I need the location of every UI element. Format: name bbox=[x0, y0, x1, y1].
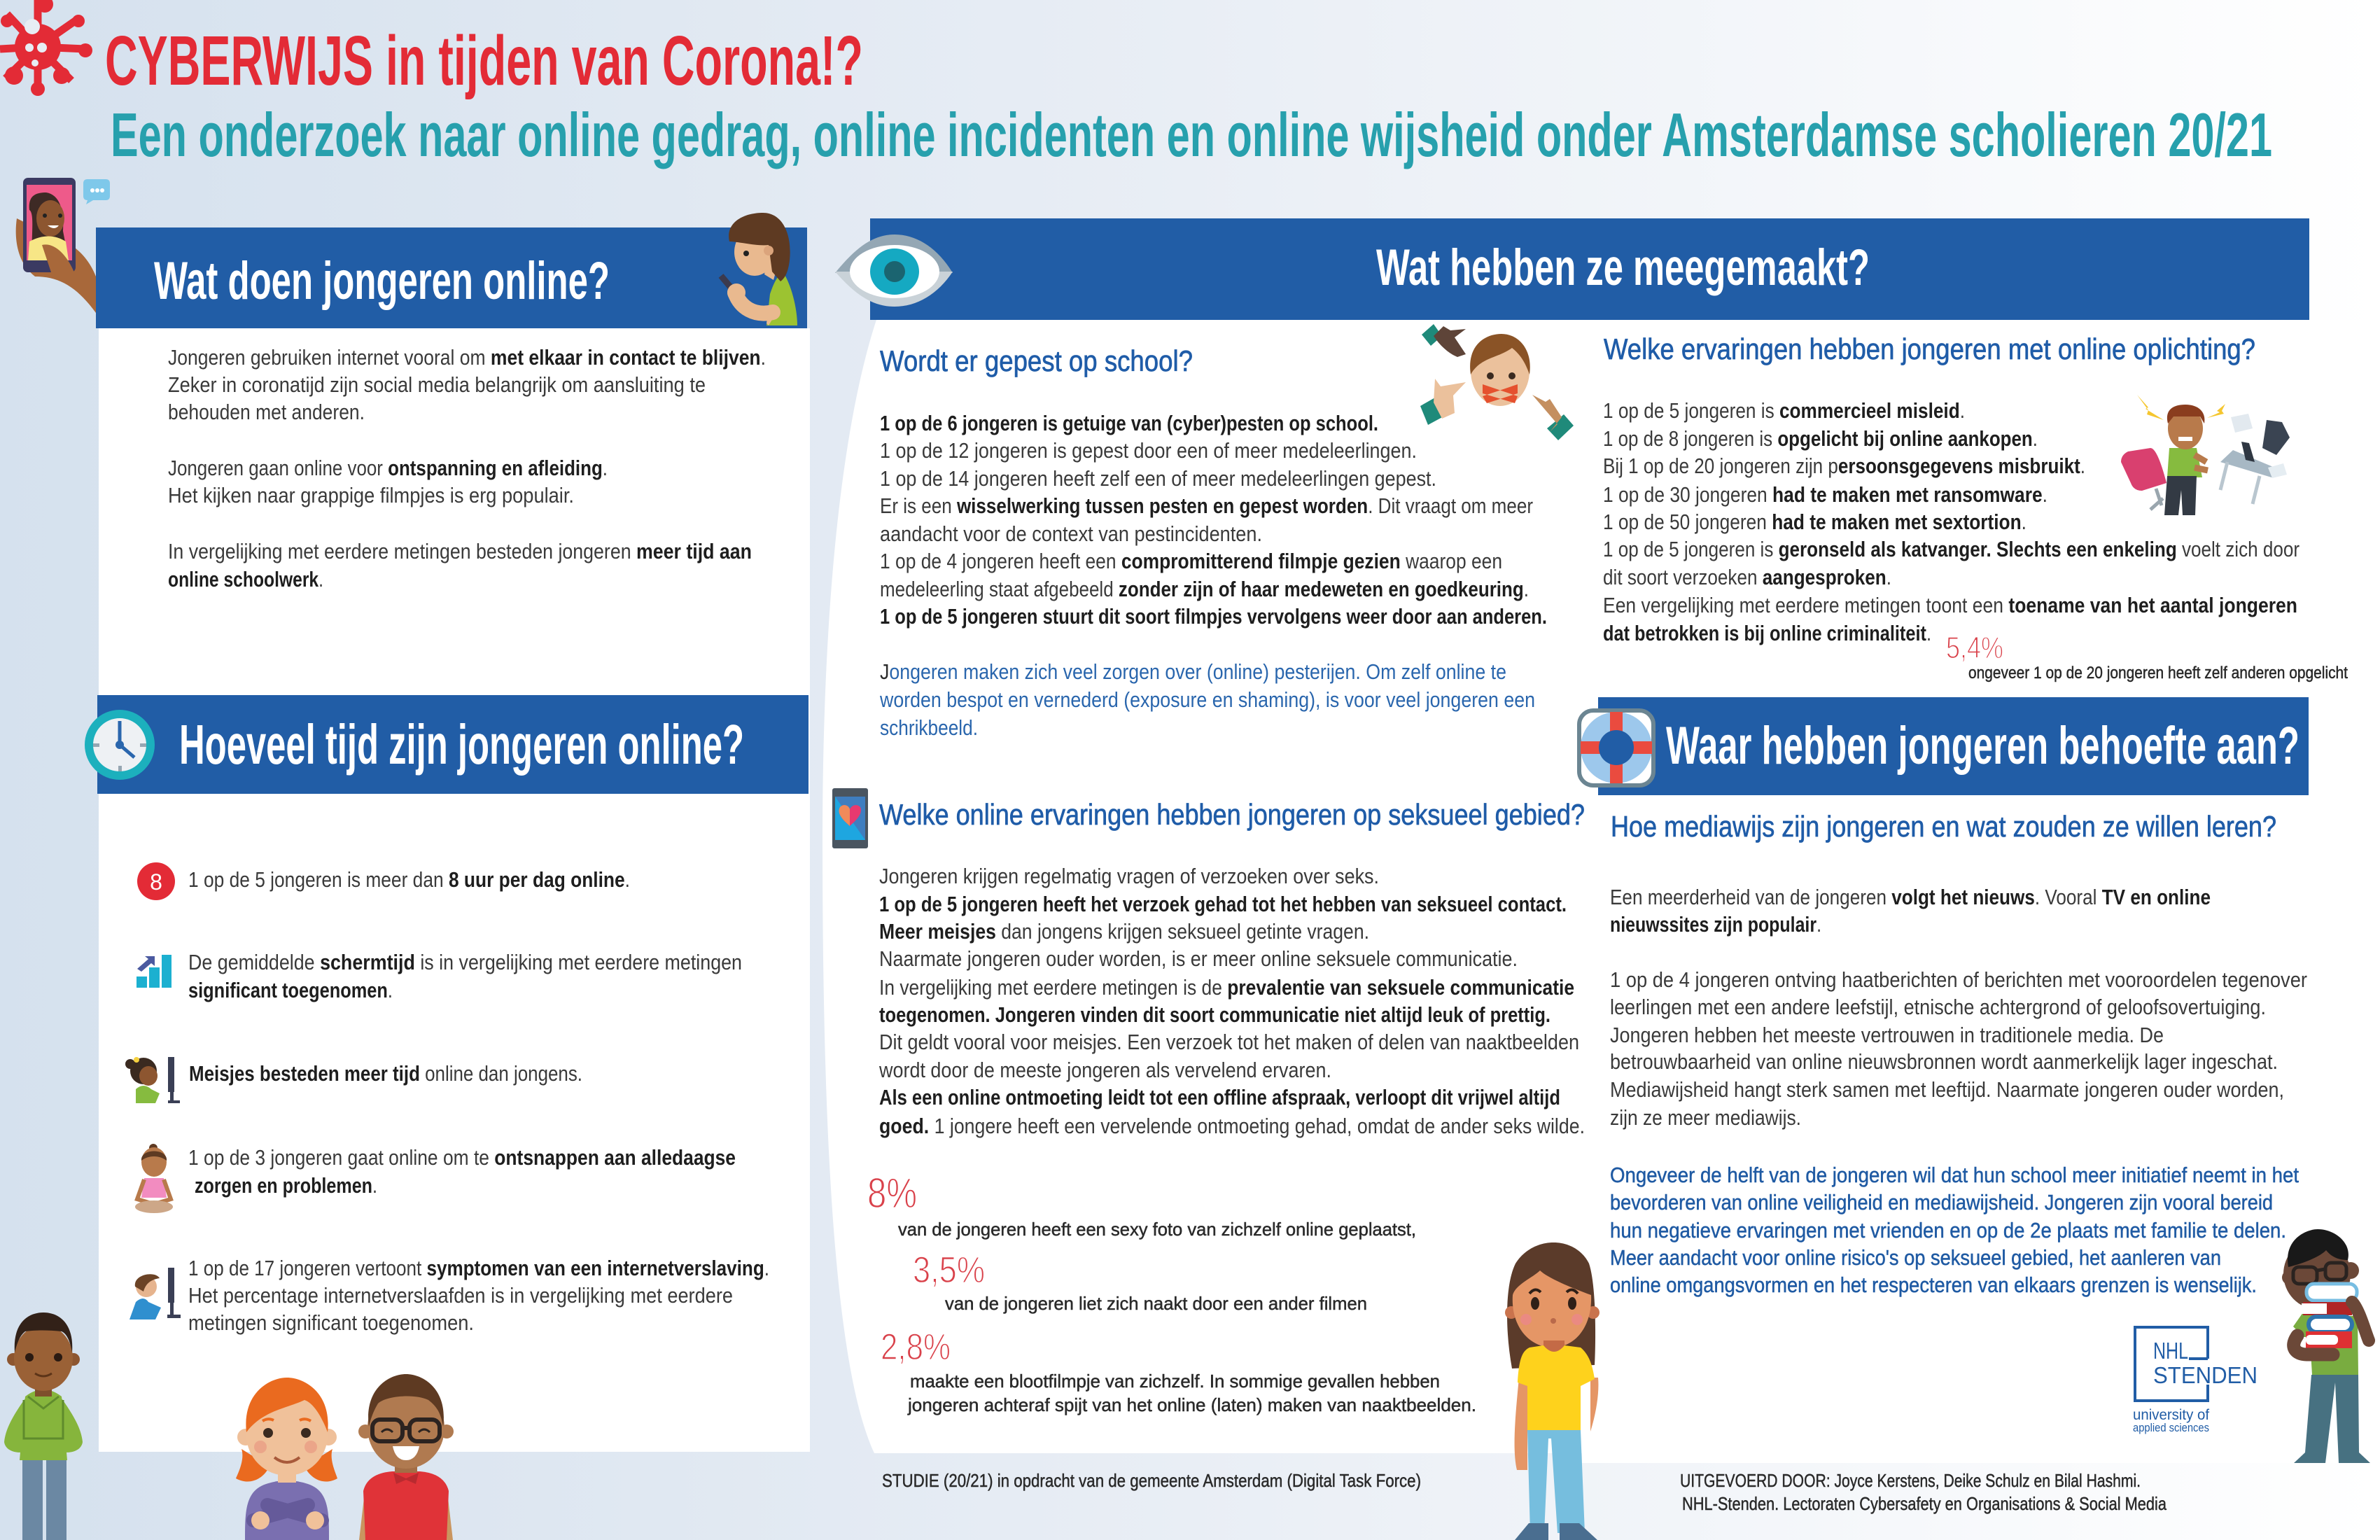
body text: oplichting: Bij 1 op de 20 jongeren zijn persoonsgegevens misbruikt. bbox=[1603, 454, 2085, 478]
body text: seksueel: In vergelijking met eerdere metingen is de prevalentie van seksuele communicatie bbox=[879, 975, 1574, 1000]
logo: NHL Stenden: applied sciences bbox=[2133, 1421, 2209, 1434]
body text: seksueel: Naarmate jongeren ouder worden, is er meer online seksuele communicatie. bbox=[879, 946, 1518, 971]
icon: meisje achter scherm bbox=[125, 1057, 180, 1103]
stat: 2,8%: jongeren achteraf spijt van het online (laten) maken van naaktbeelden. bbox=[907, 1394, 1476, 1415]
stat: 3,5%: van de jongeren liet zich naakt door een ander filmen bbox=[945, 1293, 1367, 1314]
section: online oplichting bbox=[1603, 332, 2348, 682]
icon: 8 uur bbox=[137, 862, 175, 900]
stat: 2,8%: maakte een blootfilmpje van zichzelf. In sommige gevallen hebben bbox=[910, 1371, 1440, 1392]
body text: pesten: 1 op de 4 jongeren heeft een compromitterend filmpje gezien waarop een bbox=[880, 549, 1502, 573]
stat: 5,4%: 5,4% bbox=[1946, 631, 2003, 665]
stat: 8%: 8% bbox=[867, 1170, 917, 1217]
icon: clock bbox=[85, 710, 155, 780]
footer: studie: STUDIE (20/21) in opdracht van de gemeente Amsterdam (Digital Task Force) bbox=[882, 1470, 1421, 1491]
body text: online activiteiten: In vergelijking met eerdere metingen besteden jongeren meer tijd aan bbox=[168, 539, 752, 564]
icon: getapete jongen met wijzende handen bbox=[1420, 324, 1574, 440]
body text: online activiteiten: Jongeren gaan online voor ontspanning en afleiding. bbox=[168, 456, 608, 480]
stat: 3,5% bbox=[913, 1250, 1367, 1314]
body text: oplichting: 1 op de 50 jongeren had te maken met sextortion. bbox=[1603, 510, 2026, 534]
panel: wat doen jongeren online bbox=[96, 227, 807, 592]
icon: jongen achter scherm bbox=[130, 1268, 181, 1320]
heading: seksueel gebied: Welke online ervaringen hebben jongeren op seksueel gebied? bbox=[879, 798, 1585, 831]
stat: 8% bbox=[867, 1170, 1416, 1240]
body text: mediawijs bbox=[1610, 885, 2307, 1130]
body text: pesten: Er is een wisselwerking tussen pesten en gepest worden. Dit vraagt om meer bbox=[880, 493, 1533, 518]
body text: oplichting: 1 op de 5 jongeren is geronseld als katvanger. Slechts een enkeling voelt zich door bbox=[1603, 537, 2300, 561]
callout: zorgen over pesterijen bbox=[879, 659, 1535, 740]
body text: oplichting: Een vergelijking met eerdere metingen toont een toename van het aantal jongeren bbox=[1603, 593, 2297, 617]
heading: meegemaakt: Wat hebben ze meegemaakt? bbox=[1376, 239, 1870, 296]
heading: wat doen: Wat doen jongeren online? bbox=[154, 251, 610, 311]
body text: oplichting: dit soort verzoeken aangesproken. bbox=[1603, 565, 1891, 589]
character: girl red hair bbox=[236, 1378, 337, 1540]
icon: red virus bbox=[0, 0, 92, 96]
body text: seksueel: goed. 1 jongere heeft een vervelende ontmoeting gehad, omdat de ander seks wilde. bbox=[879, 1114, 1585, 1138]
body text: online activiteiten: Jongeren gebruiken internet vooral om met elkaar in contact te blijven. bbox=[168, 345, 766, 370]
footer: uitgevoerd door: UITGEVOERD DOOR: Joyce Kerstens, Deike Schulz en Bilal Hashmi. bbox=[1680, 1470, 2141, 1491]
section: mediawijsheid bbox=[1610, 810, 2307, 1297]
heading: gepest: Wordt er gepest op school? bbox=[880, 344, 1193, 377]
character: girl yellow shirt bbox=[1505, 1242, 1600, 1540]
callout: behoefte aan initiatief school: online omgangsvormen en het respecteren van elkaars grenzen is wenselijk. bbox=[1610, 1273, 2257, 1297]
logo: NHL Stenden: university of bbox=[2133, 1407, 2209, 1423]
icon: 8 uur: 8 bbox=[150, 869, 162, 895]
stat: internetverslaving: Het percentage internetverslaafden is in vergelijking met eerdere bbox=[188, 1283, 733, 1308]
panel: waar hebben jongeren behoefte aan header bbox=[1579, 697, 2309, 795]
section: wordt er gepest bbox=[879, 324, 1574, 740]
callout: zorgen over pesterijen: Jongeren maken zich veel zorgen over (online) pesterijen. Om zelf online te bbox=[880, 659, 1506, 684]
body text: mediawijs: Een meerderheid van de jongeren volgt het nieuws. Vooral TV en online bbox=[1610, 885, 2211, 909]
body text: mediawijs: 1 op de 4 jongeren ontving haatberichten of berichten met vooroordelen tegenover bbox=[1610, 967, 2307, 992]
icon: reddingsboei bbox=[1579, 710, 1653, 785]
callout: behoefte aan initiatief school: bevorderen van online veiligheid en mediawijsheid. Jongeren zijn vooral bereid bbox=[1610, 1190, 2273, 1214]
stat: 8 uur: 1 op de 5 jongeren is meer dan 8 uur per dag online. bbox=[188, 867, 630, 892]
callout: behoefte aan initiatief school: Ongeveer de helft van de jongeren wil dat hun school meer initiatief neemt in het bbox=[1610, 1163, 2299, 1187]
body text: pesten: 1 op de 5 jongeren stuurt dit soort filmpjes vervolgens weer door aan anderen. bbox=[880, 604, 1547, 629]
body text: pesten: 1 op de 6 jongeren is getuige van (cyber)pesten op school. bbox=[880, 411, 1378, 435]
body text: pesten: medeleerling staat afgebeeld zonder zijn of haar medeweten en goedkeuring. bbox=[880, 577, 1529, 601]
body text: mediawijs: leerlingen met een andere leefstijl, etnische achtergrond of geloofsovertuiging. bbox=[1610, 995, 2266, 1019]
heading: mediawijs: Hoe mediawijs zijn jongeren en wat zouden ze willen leren? bbox=[1611, 810, 2276, 843]
body text: seksueel: 1 op de 5 jongeren heeft het verzoek gehad tot het hebben van seksueel contact. bbox=[879, 892, 1567, 916]
body text: oplichting: 1 op de 5 jongeren is commercieel misleid. bbox=[1603, 398, 1965, 423]
body text: pesten: 1 op de 14 jongeren heeft zelf een of meer medeleerlingen gepest. bbox=[880, 466, 1436, 491]
body text: online activiteiten: online schoolwerk. bbox=[168, 567, 323, 592]
stat: schermtijd: De gemiddelde schermtijd is in vergelijking met eerdere metingen bbox=[188, 950, 742, 974]
icon: boze jongen bij bureau bbox=[2121, 395, 2290, 515]
body text: mediawijs: zijn ze meer mediawijs. bbox=[1610, 1105, 1801, 1130]
body text: seksueel: Meer meisjes dan jongens krijgen seksueel getinte vragen. bbox=[879, 919, 1369, 944]
body text: oplichting: 1 op de 30 jongeren had te maken met ransomware. bbox=[1603, 482, 2047, 507]
stat: internetverslaving: 1 op de 17 jongeren vertoont symptomen van een internetverslaving. bbox=[188, 1256, 769, 1280]
icon: phone with heart bbox=[832, 788, 868, 848]
stat: meisjes: Meisjes besteden meer tijd online dan jongens. bbox=[189, 1061, 582, 1086]
panel: wat hebben ze meegemaakt header bbox=[870, 218, 2309, 320]
body text: online activiteiten: Het kijken naar grappige filmpjes is erg populair. bbox=[168, 483, 574, 507]
title: CYBERWIJS in tijden van Corona!? bbox=[105, 22, 863, 100]
icon: boy with phone bbox=[721, 213, 797, 326]
callout: zorgen over pesterijen: schrikbeeld. bbox=[880, 715, 978, 740]
body text: mediawijs: Mediawijsheid hangt sterk samen met leeftijd. Naarmate jongeren ouder worden, bbox=[1610, 1077, 2284, 1102]
stat: internetverslaving bbox=[188, 1256, 769, 1335]
body text: oplichting bbox=[1603, 398, 2300, 645]
stat: 3,5%: 3,5% bbox=[913, 1250, 985, 1291]
footer: uitgevoerd door: NHL-Stenden. Lectoraten Cybersafety en Organisations & Social Media bbox=[1682, 1493, 2166, 1514]
body text: mediawijs: Jongeren hebben het meeste vertrouwen in traditionele media. De bbox=[1610, 1023, 2164, 1047]
heading: hoeveel tijd: Hoeveel tijd zijn jongeren online? bbox=[179, 713, 744, 776]
logo: NHL Stenden: NHL bbox=[2153, 1338, 2188, 1364]
body text: seksueel: Dit geldt vooral voor meisjes. Een verzoek tot het maken of delen van naaktbeelden bbox=[879, 1030, 1579, 1054]
body text: pesten bbox=[880, 411, 1547, 629]
body text: seksueel: Als een online ontmoeting leidt tot een offline afspraak, verloopt dit vrijwel altijd bbox=[879, 1085, 1560, 1110]
body text: seksueel bbox=[878, 864, 1585, 1138]
stat: internetverslaving: metingen significant toegenomen. bbox=[188, 1310, 474, 1335]
body text: seksueel: Jongeren krijgen regelmatig vragen of verzoeken over seks. bbox=[879, 864, 1379, 888]
stat: 2,8% bbox=[881, 1326, 1476, 1415]
heading: oplichting: Welke ervaringen hebben jongeren met online oplichting? bbox=[1604, 332, 2255, 365]
logo: NHL Stenden: STENDEN bbox=[2153, 1362, 2258, 1388]
body text: pesten: aandacht voor de context van pestincidenten. bbox=[880, 522, 1262, 546]
section: seksueel gebied bbox=[832, 788, 1585, 1415]
body text: oplichting: 1 op de 8 jongeren is opgelicht bij online aankopen. bbox=[1603, 426, 2038, 451]
white background panels bbox=[99, 320, 2380, 1463]
callout: behoefte aan initiatief school: Meer aandacht voor online risico's op seksueel gebied, het aanleren van bbox=[1610, 1245, 2221, 1270]
body text: pesten: 1 op de 12 jongeren is gepest door een of meer medeleerlingen. bbox=[880, 438, 1417, 463]
body text: mediawijs: nieuwssites zijn populair. bbox=[1610, 912, 1821, 937]
stat: 2,8%: 2,8% bbox=[881, 1326, 951, 1368]
stat: schermtijd: significant toegenomen. bbox=[188, 978, 393, 1002]
icon: toenemende staven bbox=[136, 955, 172, 988]
icon: mediterend meisje bbox=[135, 1144, 173, 1213]
body text: oplichting: dat betrokken is bij online criminaliteit. bbox=[1603, 621, 1931, 645]
character: boy green hoodie bbox=[4, 1312, 83, 1540]
icon: eye bbox=[835, 234, 953, 307]
stat: schermtijd bbox=[188, 950, 742, 1002]
callout: zorgen over pesterijen: worden bespot en vernederd (exposure en shaming), is voor veel jongeren een bbox=[879, 687, 1535, 712]
panel: hoeveel tijd bbox=[85, 695, 808, 1335]
callout: behoefte aan initiatief school: hun negatieve ervaringen met vrienden en op de 2e plaats met familie te delen. bbox=[1610, 1218, 2286, 1242]
body text: mediawijs: betrouwbaarheid van online nieuwsbronnen wordt aanmerkelijk lager ingeschat. bbox=[1610, 1049, 2278, 1074]
stat: ontsnappen: 1 op de 3 jongeren gaat online om te ontsnappen aan alledaagse bbox=[188, 1145, 736, 1170]
character: boy with books bbox=[2282, 1229, 2370, 1463]
body text: online activiteiten: Zeker in coronatijd zijn social media belangrijk om aansluiting te bbox=[168, 372, 706, 397]
stat: 8%: van de jongeren heeft een sexy foto van zichzelf online geplaatst, bbox=[898, 1219, 1416, 1240]
footer: uitgevoerd door bbox=[1680, 1470, 2166, 1514]
body text: online activiteiten bbox=[168, 345, 766, 592]
body text: seksueel: wordt door de meeste jongeren als vervelend ervaren. bbox=[878, 1058, 1331, 1082]
stat: 5,4% bbox=[1946, 631, 2348, 682]
callout: behoefte aan initiatief school bbox=[1610, 1163, 2299, 1297]
character: boy with glasses bbox=[358, 1374, 454, 1540]
icon: hand holding phone bbox=[16, 178, 110, 313]
stat: ontsnappen bbox=[188, 1145, 736, 1198]
logo: NHL Stenden bbox=[2133, 1327, 2258, 1434]
body text: seksueel: toegenomen. Jongeren vinden dit soort communicatie niet altijd leuk of prettig. bbox=[879, 1002, 1550, 1027]
body text: online activiteiten: behouden met anderen. bbox=[168, 400, 365, 424]
stat: ontsnappen: zorgen en problemen. bbox=[195, 1173, 377, 1198]
